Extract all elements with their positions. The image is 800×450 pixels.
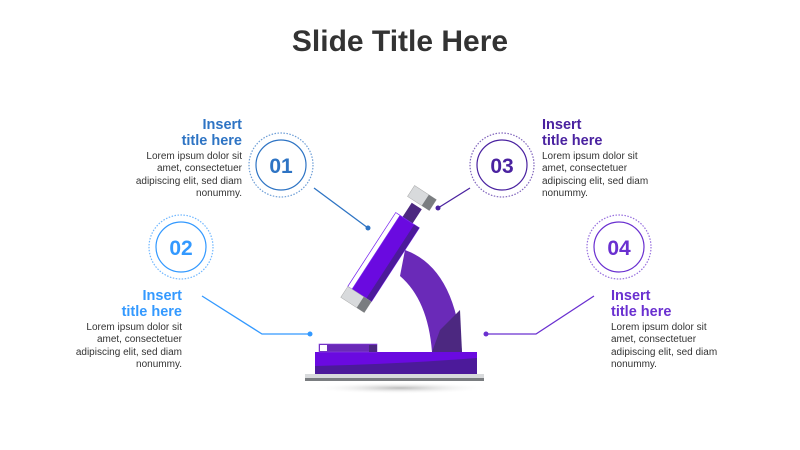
badge 03 — [470, 133, 534, 197]
connector 02 — [202, 296, 312, 336]
heading 01 — [182, 117, 242, 148]
badge 04: 04 — [607, 237, 631, 260]
heading 04 — [611, 288, 671, 320]
body 02: amet, consectetuer — [97, 334, 182, 345]
heading 04: Insert — [611, 288, 650, 304]
heading 03: title here — [542, 132, 602, 148]
heading 03: Insert — [542, 117, 582, 133]
body 01 — [136, 151, 242, 199]
heading 04: title here — [611, 304, 671, 320]
body 02: Lorem ipsum dolor sit — [86, 322, 182, 333]
heading 03 — [542, 117, 602, 148]
body 04: amet, consectetuer — [611, 334, 696, 345]
heading 02: Insert — [142, 288, 182, 304]
badge 02: 02 — [169, 237, 193, 260]
body 03: adipiscing elit, sed diam — [542, 176, 648, 187]
heading 01: title here — [182, 132, 242, 148]
heading 02 — [122, 288, 182, 320]
body 03: nonummy. — [542, 188, 588, 199]
badge 01 — [249, 133, 313, 197]
heading 02: title here — [122, 304, 182, 320]
badge 01: 01 — [269, 155, 293, 178]
badge 04 — [587, 215, 651, 279]
badge 02 — [149, 215, 213, 279]
connector 04 — [484, 296, 594, 336]
body 04: adipiscing elit, sed diam — [611, 347, 717, 358]
body 02 — [76, 322, 182, 370]
body 01: Lorem ipsum dolor sit — [146, 151, 242, 162]
text block 04 — [611, 288, 717, 370]
body 04 — [611, 322, 717, 370]
connector 01 — [314, 188, 370, 230]
body 02: nonummy. — [136, 359, 182, 370]
connector 03 — [436, 188, 470, 210]
body 03 — [542, 151, 648, 199]
text block 03 — [542, 117, 648, 199]
title: Slide Title Here — [292, 25, 508, 58]
body 04: Lorem ipsum dolor sit — [611, 322, 707, 333]
text block 01 — [136, 117, 242, 199]
body 04: nonummy. — [611, 359, 657, 370]
body 02: adipiscing elit, sed diam — [76, 347, 182, 358]
microscope — [305, 185, 490, 394]
body 03: Lorem ipsum dolor sit — [542, 151, 638, 162]
body 01: adipiscing elit, sed diam — [136, 176, 242, 187]
body 03: amet, consectetuer — [542, 163, 627, 174]
text block 02 — [76, 288, 182, 370]
body 01: nonummy. — [196, 188, 242, 199]
body 01: amet, consectetuer — [157, 163, 242, 174]
heading 01: Insert — [202, 117, 242, 133]
badge 03: 03 — [490, 155, 514, 178]
